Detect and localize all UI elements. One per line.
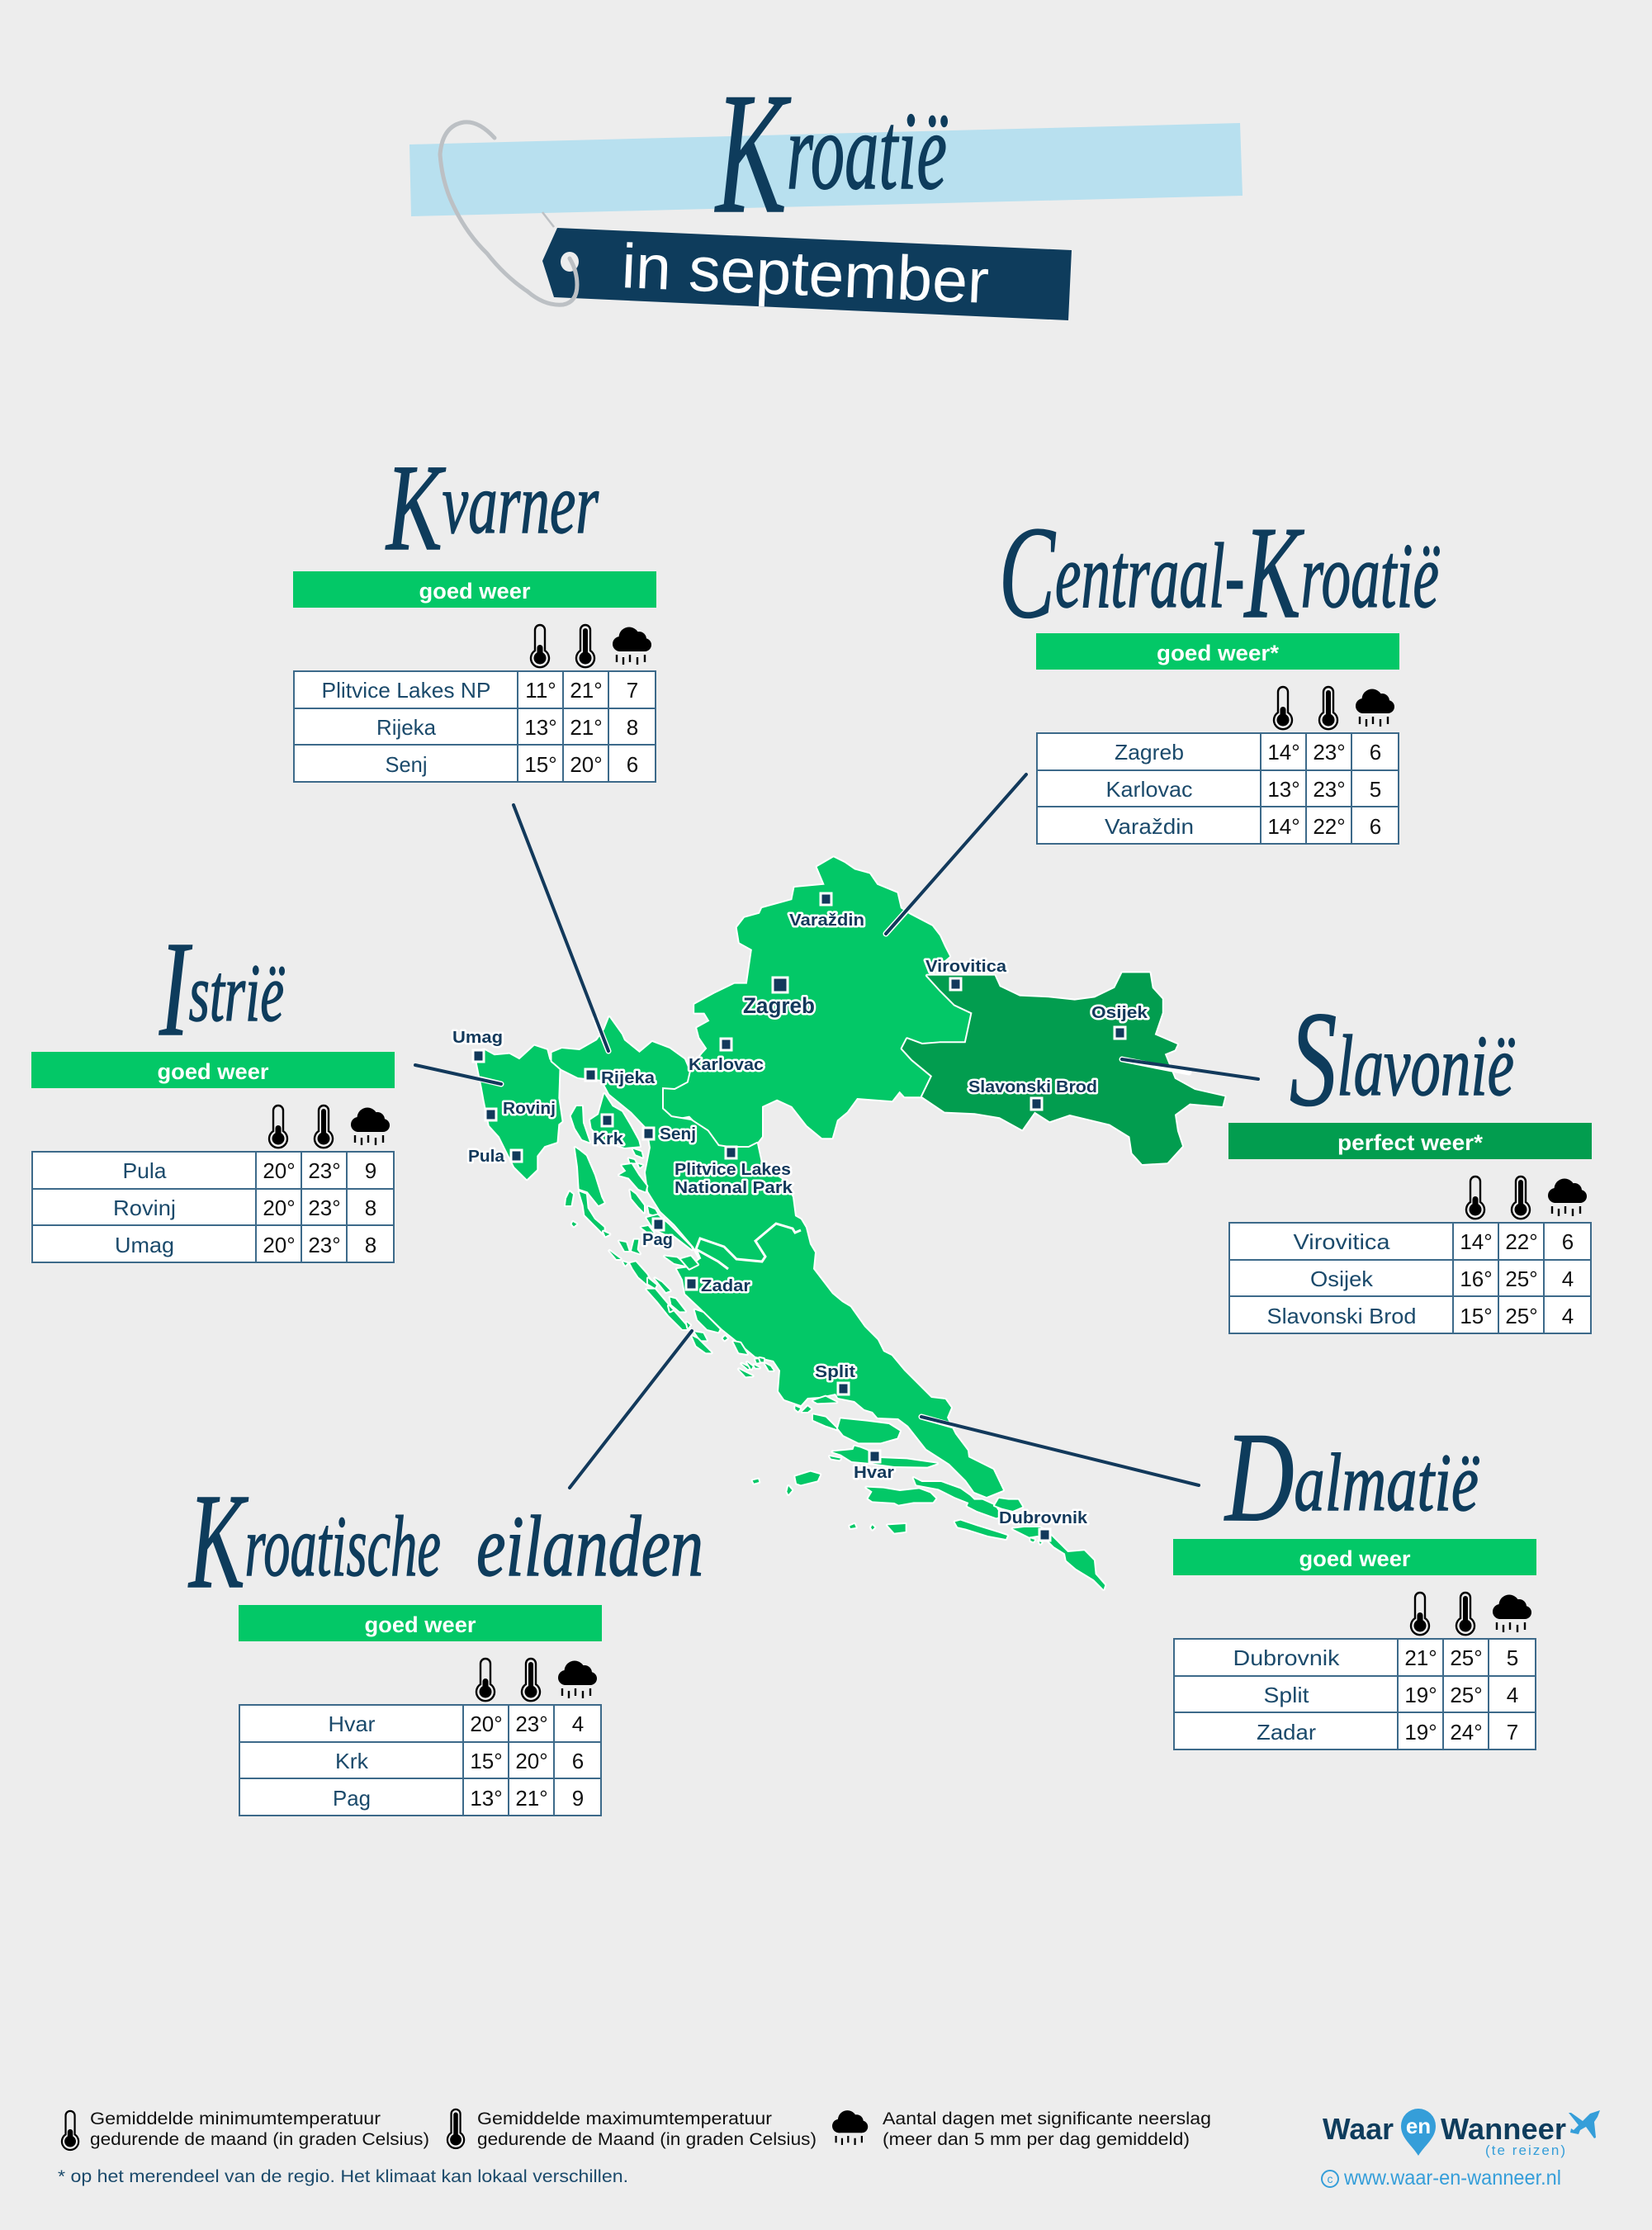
logo [1322, 2109, 1600, 2190]
table: Istrië: 8 [365, 1195, 376, 1220]
map of Croatia [477, 857, 1225, 1589]
table: Kroatische eilanden: 15° [470, 1749, 503, 1773]
table: Slavonië [1228, 1123, 1592, 1333]
table: Istrië: 23° [308, 1195, 341, 1220]
table: Dalmatië: 19° [1404, 1720, 1437, 1745]
map markers and labels: Slavonski Brod [968, 1077, 1097, 1096]
region: Kvarner and Dalmatia mainland [551, 1017, 1003, 1497]
table: Kroatische eilanden: 20° [515, 1749, 548, 1773]
table: Centraal-Kroatië: 14° [1267, 814, 1300, 839]
table: Kroatische eilanden: 9 [572, 1786, 584, 1811]
map markers and labels: Rovinj [503, 1099, 556, 1118]
heading: Dalmatië: almatië [1294, 1437, 1479, 1528]
logo: Wanneer [1441, 2112, 1566, 2146]
legend: gedurende de maand (in graden Celsius) [90, 2130, 429, 2149]
map markers and labels: Pula [468, 1147, 505, 1166]
panel: Dalmatië [1173, 1406, 1536, 1749]
region: southern islands [787, 1397, 1105, 1589]
table: Istrië: Pula [122, 1158, 167, 1183]
table: Slavonië: 4 [1562, 1267, 1574, 1291]
table: Slavonië: 15° [1460, 1304, 1493, 1328]
table: Slavonië: 22° [1505, 1229, 1538, 1254]
table: Slavonië: 6 [1562, 1229, 1574, 1254]
title: Kroatië: K [714, 58, 792, 249]
map markers and labels: Virovitica [925, 957, 1007, 976]
table: Istrië: Rovinj [113, 1195, 176, 1220]
heading: Kroatische eilanden [188, 1465, 703, 1617]
legend [62, 2109, 1211, 2150]
title banner [409, 58, 1243, 320]
footnote: * op het merendeel van de regio. Het klimaat kan lokaal verschillen. [58, 2167, 628, 2186]
table: Dalmatië: 24° [1450, 1720, 1483, 1745]
logo: www.waar-en-wanneer.nl [1343, 2166, 1561, 2190]
table: Kroatische eilanden: 6 [572, 1749, 584, 1773]
table: Dalmatië: Zadar [1257, 1720, 1316, 1745]
table: Kvarner: 21° [570, 715, 603, 740]
map markers and labels: Rijeka [601, 1068, 656, 1087]
table: Centraal-Kroatië [1036, 633, 1399, 844]
table: Centraal-Kroatië: Zagreb [1115, 740, 1184, 765]
logo: (te reizen) [1485, 2142, 1565, 2158]
table: Slavonië: 16° [1460, 1267, 1493, 1291]
map markers and labels: Zadar [701, 1276, 750, 1295]
table: Kvarner: 21° [570, 678, 603, 703]
panel: Slavonië [1228, 983, 1592, 1333]
table: Kroatische eilanden: 20° [470, 1712, 503, 1736]
logo: c [1328, 2172, 1332, 2185]
table: Centraal-Kroatië: 23° [1313, 740, 1346, 765]
table: Centraal-Kroatië: Varaždin [1105, 814, 1194, 839]
table: Kvarner: 7 [627, 678, 638, 703]
map markers and labels: Krk [593, 1129, 624, 1148]
table: Dalmatië: goed weer [1299, 1546, 1411, 1571]
heading: Slavonië: lavonië [1337, 1017, 1515, 1114]
table: Dalmatië: 5 [1507, 1645, 1518, 1670]
map markers and labels: Hvar [854, 1463, 894, 1482]
icon: plane [1569, 2110, 1600, 2138]
map markers and labels: Osijek [1091, 1003, 1148, 1022]
panel: Kvarner [293, 439, 656, 782]
subtitle tag: in september [542, 228, 1072, 320]
legend: gedurende de Maand (in graden Celsius) [477, 2130, 817, 2149]
table: Kvarner: 15° [524, 752, 557, 777]
table: Kvarner: 8 [627, 715, 638, 740]
table: Istrië [31, 1052, 395, 1262]
region: central Adriatic islands [646, 1290, 774, 1484]
table: Slavonië: perfect weer* [1337, 1130, 1483, 1155]
table: Kvarner: 20° [570, 752, 603, 777]
table: Centraal-Kroatië: goed weer* [1157, 641, 1280, 665]
table: Kvarner: 13° [524, 715, 557, 740]
table: Centraal-Kroatië: 13° [1267, 777, 1300, 802]
table: Kroatische eilanden: Hvar [329, 1712, 376, 1736]
logo: en [1406, 2114, 1431, 2138]
legend: (meer dan 5 mm per dag gemiddeld) [883, 2130, 1190, 2149]
table: Kroatische eilanden: 4 [572, 1712, 584, 1736]
table: Centraal-Kroatië: 23° [1313, 777, 1346, 802]
table: Istrië: 23° [308, 1233, 341, 1257]
legend: Aantal dagen met significante neerslag [883, 2109, 1211, 2128]
table: Dalmatië: Split [1263, 1683, 1309, 1707]
heading: Istrië: I [159, 913, 192, 1064]
heading: Centraal-Kroatië: roatië [1300, 525, 1440, 627]
table: Slavonië: Osijek [1310, 1267, 1374, 1291]
connector: Central Croatia [886, 774, 1026, 934]
table: Dalmatië: 4 [1507, 1683, 1518, 1707]
table: Centraal-Kroatië: 6 [1370, 740, 1381, 765]
table: Dalmatië: Dubrovnik [1233, 1645, 1341, 1670]
table: Dalmatië: 7 [1507, 1720, 1518, 1745]
table: Kvarner: Rijeka [376, 715, 437, 740]
heading: Kroatische eilanden: eilanden [476, 1498, 703, 1594]
table: Istrië: 20° [263, 1233, 296, 1257]
table: Kroatische eilanden: 21° [515, 1786, 548, 1811]
legend: Gemiddelde maximumtemperatuur [477, 2109, 772, 2128]
table: Slavonië: Slavonski Brod [1266, 1304, 1417, 1328]
table: Kvarner [293, 571, 656, 782]
map markers and labels: Senj [660, 1124, 696, 1143]
table: Slavonië: Virovitica [1293, 1229, 1390, 1254]
region: northern islands [566, 1094, 698, 1292]
table: Slavonië: 25° [1505, 1267, 1538, 1291]
table: Kvarner: Plitvice Lakes NP [322, 678, 490, 703]
table: Kvarner: 11° [525, 678, 556, 703]
table: Slavonië: 14° [1460, 1229, 1493, 1254]
legend: Gemiddelde minimumtemperatuur [90, 2109, 381, 2128]
panel: Istrië [31, 913, 395, 1262]
table: Istrië: 8 [365, 1233, 376, 1257]
connector: Slavonia [1122, 1059, 1258, 1079]
heading: Centraal-Kroatië: C [999, 499, 1056, 646]
table: Centraal-Kroatië: 14° [1267, 740, 1300, 765]
heading: Slavonië: S [1290, 983, 1337, 1134]
table: Kroatische eilanden [239, 1605, 602, 1816]
table: Istrië: goed weer [157, 1059, 269, 1084]
title: Kroatië: roatië [787, 90, 948, 213]
table: Dalmatië: 25° [1450, 1645, 1483, 1670]
table: Kroatische eilanden: 13° [470, 1786, 503, 1811]
table: Kroatische eilanden: Krk [335, 1749, 369, 1773]
heading: Dalmatië: D [1224, 1406, 1294, 1548]
region boundaries [696, 1224, 801, 1269]
map markers and labels: Umag [452, 1028, 503, 1047]
map markers and labels: Dubrovnik [999, 1508, 1088, 1527]
region: Central Croatia [662, 857, 973, 1148]
table: Kroatische eilanden: Pag [333, 1786, 371, 1811]
table: Kroatische eilanden: goed weer [365, 1612, 476, 1637]
heading: Centraal-Kroatië: K [1243, 499, 1304, 646]
table: Kvarner: 6 [627, 752, 638, 777]
table: Centraal-Kroatië: 5 [1370, 777, 1381, 802]
table: Kroatische eilanden: 23° [515, 1712, 548, 1736]
heading: Centraal-Kroatië: entraal- [1055, 525, 1245, 627]
heading: Istrië: strië [189, 947, 285, 1039]
table: Istrië: 20° [263, 1195, 296, 1220]
map markers and labels: Karlovac [689, 1055, 764, 1074]
table: Slavonië: 25° [1505, 1304, 1538, 1328]
map markers and labels: Pag [642, 1230, 673, 1249]
panel: Centraal-Kroatië [999, 499, 1440, 844]
table: Kvarner: Senj [385, 752, 428, 777]
map markers and labels [452, 893, 1148, 1541]
panel: Kroatische eilanden [188, 1465, 703, 1816]
table: Istrië: 9 [365, 1158, 376, 1183]
table: Istrië: 23° [308, 1158, 341, 1183]
table: Centraal-Kroatië: Karlovac [1106, 777, 1192, 802]
map markers and labels: Varaždin [789, 911, 864, 930]
heading: Kroatische eilanden: K [188, 1465, 249, 1617]
region: Istria [477, 1046, 562, 1179]
connector: Croatian islands [570, 1331, 692, 1488]
heading: Kvarner: K [386, 439, 446, 576]
table: Dalmatië: 19° [1404, 1683, 1437, 1707]
table: Slavonië: 4 [1562, 1304, 1574, 1328]
table: Dalmatië: 21° [1404, 1645, 1437, 1670]
map markers and labels: Split [815, 1362, 855, 1381]
tag ring [440, 122, 577, 305]
table: Istrië: Umag [115, 1233, 174, 1257]
logo: Waar [1323, 2112, 1394, 2146]
table: Centraal-Kroatië: 22° [1313, 814, 1346, 839]
heading: Kroatische eilanden: roatische [245, 1498, 441, 1594]
map markers and labels: Plitvice Lakes [675, 1160, 791, 1179]
table: Kvarner: goed weer [419, 579, 531, 604]
connector: Dalmatia [921, 1417, 1199, 1485]
map markers and labels: National Park [675, 1178, 793, 1197]
table: Dalmatië [1173, 1539, 1536, 1749]
subtitle tag: in september: in september [620, 231, 991, 317]
connector: Istria [415, 1065, 501, 1084]
map markers and labels: Zagreb [743, 993, 815, 1018]
connector: Kvarner [514, 805, 608, 1051]
heading: Kvarner: varner [443, 455, 599, 552]
table: Dalmatië: 25° [1450, 1683, 1483, 1707]
table: Istrië: 20° [263, 1158, 296, 1183]
table: Centraal-Kroatië: 6 [1370, 814, 1381, 839]
region: Slavonia [902, 973, 1225, 1164]
